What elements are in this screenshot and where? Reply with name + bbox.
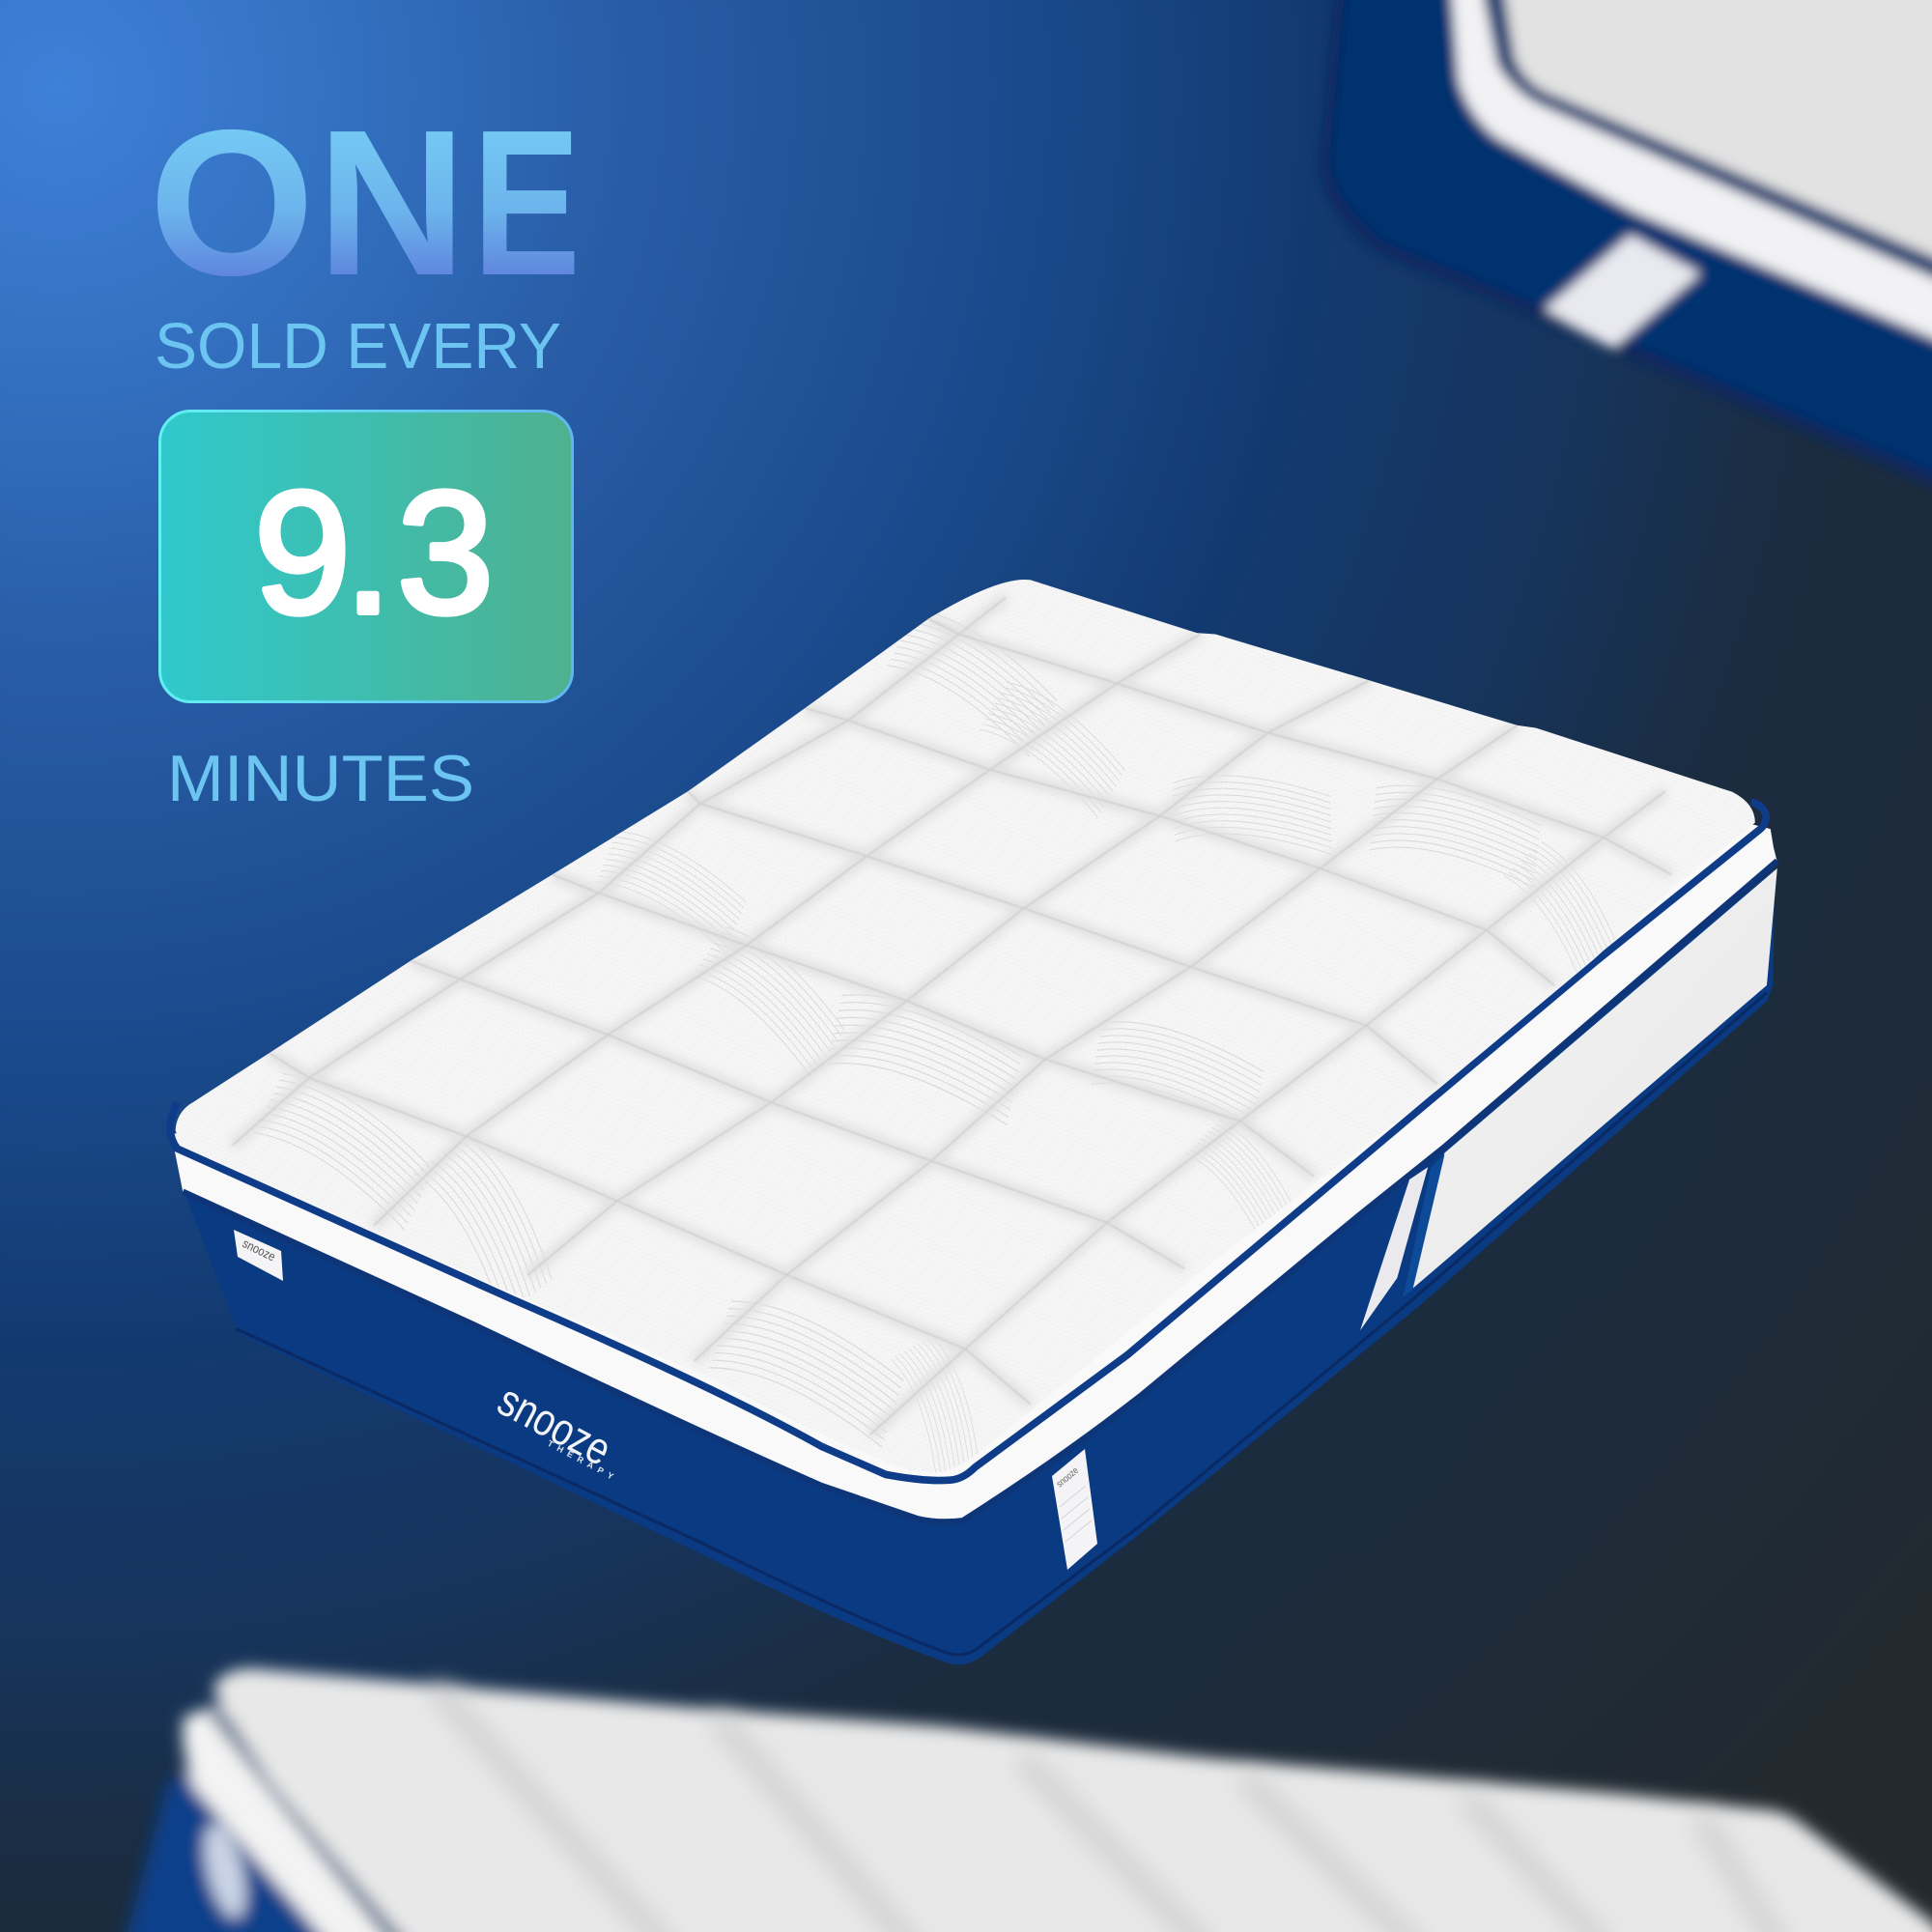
tag: right sewn label: snooze bbox=[1055, 1465, 1081, 1490]
callout: 9.3 badge bbox=[160, 412, 572, 701]
side stripe: white handle bbox=[1360, 1167, 1428, 1330]
brand logo: snooze bbox=[490, 1374, 620, 1475]
white band bbox=[171, 807, 1777, 1520]
quilting: soft crease shadows bbox=[232, 597, 1671, 1435]
blurred mattress: top right corner bbox=[1321, 0, 1932, 497]
heading: ONE: N bbox=[317, 86, 467, 319]
side panel: white mesh bbox=[1404, 868, 1777, 1296]
tag: left sewn label: snooze bbox=[241, 1236, 278, 1264]
callout: 9.3 badge: 9.3 bbox=[254, 456, 494, 650]
quilting: wave stitch patches bbox=[244, 604, 1637, 1476]
mattress side: blue fabric bbox=[181, 868, 1775, 1664]
blurred mattress: bottom edge bbox=[120, 1668, 1932, 1932]
text: MINUTES: MINUTES bbox=[167, 742, 474, 815]
upper piping bbox=[170, 802, 1766, 1481]
main mattress bbox=[143, 560, 1806, 1664]
heading: ONE: E bbox=[472, 86, 581, 319]
text: SOLD EVERY: SOLD EVERY bbox=[155, 310, 561, 383]
quilting: crease lines bbox=[232, 597, 1671, 1435]
heading: ONE bbox=[149, 86, 581, 319]
blurred mattress: soft creases bbox=[436, 1688, 1782, 1932]
heading: ONE: O bbox=[149, 86, 315, 319]
tag: left sewn label bbox=[234, 1230, 283, 1281]
lower piping bbox=[183, 861, 1777, 1521]
side strap: blue bbox=[1404, 1154, 1444, 1296]
side piping: dark lower seam bbox=[236, 993, 1767, 1655]
brand logo: THERAPY bbox=[546, 1438, 615, 1481]
quilting: knit texture and creases bbox=[143, 560, 1806, 1496]
mattress top surface bbox=[176, 580, 1755, 1473]
tag: right sewn label bbox=[1052, 1449, 1097, 1570]
